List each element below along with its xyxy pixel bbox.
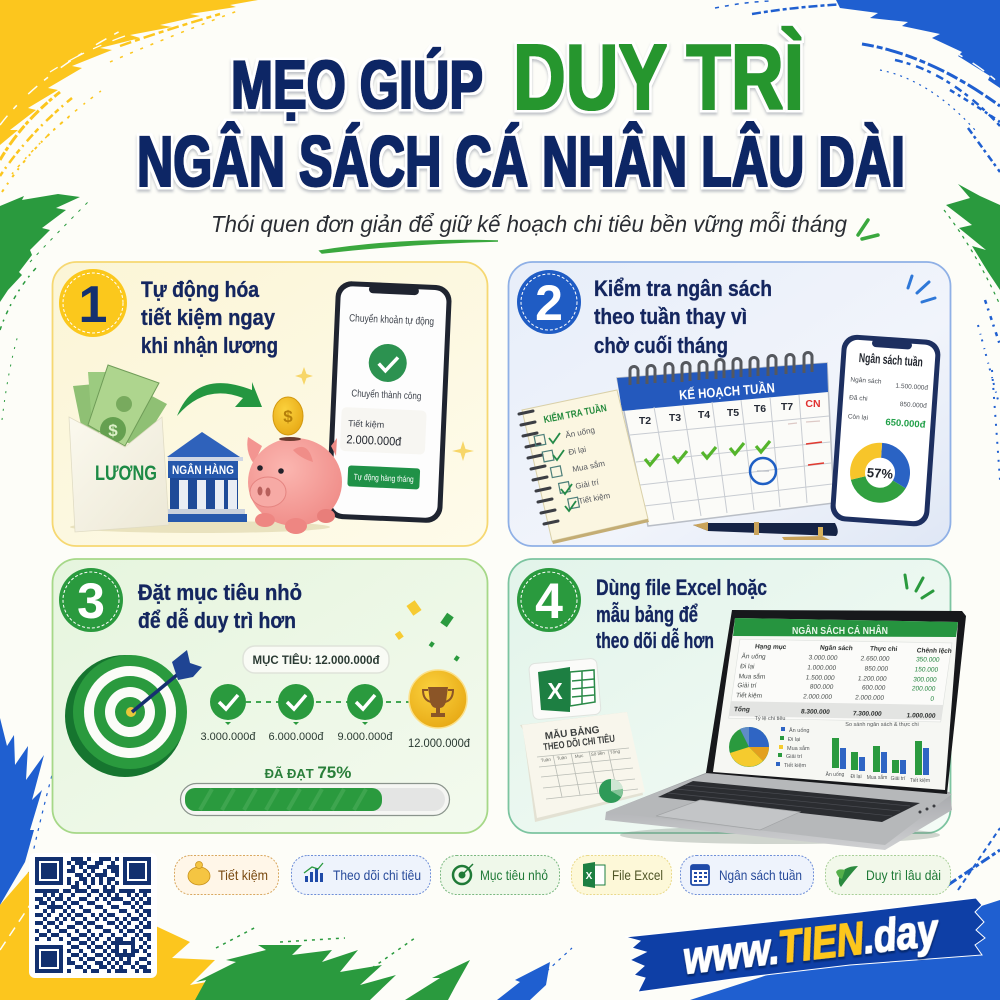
heading 2: Kiểm tra ngân sách	[594, 276, 772, 301]
budget table: 2.000.000	[855, 694, 885, 702]
arrow: salary to piggy bank	[177, 382, 262, 416]
laptop: personal budget: NGÂN SÁCH CÁ NHÂN	[792, 624, 888, 637]
notebook: weekly checklist: Mua sắm	[572, 459, 606, 474]
brush strokes: left blue	[0, 718, 52, 905]
brush strokes: bottom left yellow	[0, 868, 245, 1000]
notebook spirals	[519, 411, 558, 524]
progress label: ĐÃ ĐẠT 75%	[265, 763, 351, 782]
heading 4: mẫu bảng để	[596, 602, 698, 627]
phone: weekly budget: Đã chi	[849, 394, 868, 403]
budget table: Tổng	[733, 705, 750, 713]
pie chart: Đi lại	[788, 737, 800, 743]
pill: Mục tiêu nhỏ: Mục tiêu nhỏ	[480, 867, 548, 883]
phone: auto transfer: Chuyển thành công	[351, 387, 422, 402]
brush strokes: bottom blue	[497, 828, 1000, 1000]
heading 1	[141, 277, 278, 358]
badge 4: 4	[535, 573, 563, 629]
phone: weekly budget: 850.000đ	[899, 401, 927, 410]
brush strokes: right blue speckle	[978, 300, 1000, 480]
budget table	[729, 639, 953, 722]
pill: Tiết kiệm	[174, 856, 278, 894]
heading 1: khi nhận lương	[141, 333, 278, 358]
panel 3: small goals	[52, 559, 488, 833]
phone: auto transfer: 2.000.000đ	[346, 432, 402, 449]
heading 4: theo dõi dễ hơn	[596, 628, 714, 653]
laptop shadow	[620, 826, 940, 844]
budget table: Tiết kiệm	[735, 690, 763, 700]
notebook: weekly checklist: Tiết kiệm	[578, 491, 611, 506]
phone: auto transfer	[326, 281, 452, 523]
budget table: 1.000.000	[807, 664, 837, 672]
milestone 9.000.000đ: 9.000.000đ	[337, 731, 393, 743]
template sheet: Mục	[575, 753, 584, 759]
badge 3	[59, 568, 123, 632]
bar chart: Giải trí	[891, 776, 906, 782]
pie chart: Mua sắm	[787, 745, 810, 752]
budget table: 150.000	[914, 666, 939, 674]
pie chart: Giải trí	[786, 754, 803, 760]
laptop lid	[706, 610, 966, 794]
bar chart: Tiết kiệm	[910, 778, 930, 784]
icon: salary envelope with money: $	[108, 421, 118, 440]
template sheet: Số tiền	[591, 750, 606, 757]
budget table: 800.000	[809, 684, 834, 691]
budget table: 1.000.000	[906, 712, 936, 720]
calendar day labels: T5	[727, 407, 739, 419]
template sheet: THEO DÕI CHI TIÊU	[543, 732, 616, 753]
bar chart	[826, 722, 930, 784]
title line: MẸO GIÚP: MẸO GIÚP	[231, 47, 483, 123]
title	[137, 25, 905, 202]
pill: Ngân sách tuần: Ngân sách tuần	[719, 867, 802, 883]
phone: weekly budget: 650.000đ	[885, 417, 926, 431]
title line: DUY TRÌ: DUY TRÌ	[513, 25, 804, 129]
icon: bank: NGÂN HÀNG	[172, 464, 234, 477]
progress bar	[180, 784, 450, 816]
heading 3: Đặt mục tiêu nhỏ	[138, 580, 302, 605]
heading 2: theo tuần thay vì	[594, 304, 747, 329]
heading 3: để dễ duy trì hơn	[138, 608, 296, 633]
icon: excel: X	[547, 678, 563, 704]
badge 3: 3	[77, 573, 105, 629]
notebook: weekly checklist: Đi lại	[568, 445, 587, 457]
budget table: Mua sắm	[738, 671, 766, 681]
calendar red dashes	[806, 442, 824, 465]
milestone 3.000.000đ: 3.000.000đ	[200, 731, 256, 743]
icon: bank	[167, 432, 247, 522]
notebook: weekly checklist: Ăn uống	[565, 425, 596, 440]
phone: weekly budget: 1.500.000đ	[895, 383, 929, 392]
bar chart: Mua sắm	[867, 774, 887, 781]
tag pills	[174, 856, 950, 894]
panel 2: weekly budget check	[508, 262, 950, 546]
budget table: 0	[930, 696, 935, 703]
phone: auto transfer: Chuyển khoản tự động	[349, 312, 434, 328]
pill: Duy trì lâu dài: Duy trì lâu dài	[866, 867, 941, 883]
heading 1: Tự động hóa	[141, 277, 260, 302]
calendar: weekly plan: KẾ HOẠCH TUẦN	[679, 380, 775, 403]
pill: Tiết kiệm: Tiết kiệm	[218, 867, 268, 883]
notebook: weekly checklist	[519, 390, 649, 544]
bar chart: So sánh ngân sách & thực chi	[845, 722, 919, 728]
budget table: Đi lại	[740, 663, 756, 670]
calendar day labels: T4	[698, 409, 710, 421]
budget table: Thực chi	[869, 646, 898, 653]
budget table: 1.500.000	[805, 674, 835, 682]
website banner	[625, 898, 985, 992]
budget table: 200.000	[911, 685, 936, 693]
budget table: 300.000	[913, 676, 937, 684]
heading 1: tiết kiệm ngay	[141, 305, 276, 330]
template sheet: Tuần	[557, 755, 568, 761]
calendar day labels: T3	[669, 412, 681, 424]
panel 1: automate savings	[52, 262, 488, 546]
budget table: 2.650.000	[860, 655, 890, 663]
goal pill	[243, 646, 389, 673]
budget table: Ngân sách	[819, 645, 853, 652]
budget table: 1.200.000	[857, 675, 887, 683]
soft shadow	[70, 521, 330, 533]
budget table: 350.000	[916, 656, 940, 664]
phone: weekly budget: 57%	[866, 465, 894, 482]
badge 1	[59, 269, 127, 337]
milestone 3.000.000đ	[200, 684, 256, 743]
phone: auto transfer: Tự động hàng tháng	[354, 472, 414, 484]
bar chart: Đi lại	[850, 774, 862, 780]
pill: Theo dõi chi tiêu: Theo dõi chi tiêu	[333, 867, 421, 883]
template sheet: MẪU BẢNG	[544, 723, 600, 742]
icon: excel	[529, 658, 601, 720]
milestones	[200, 670, 470, 750]
calendar checks	[645, 441, 770, 465]
heading 3	[138, 580, 302, 633]
milestone 6.000.000đ: 6.000.000đ	[268, 731, 324, 743]
calendar day labels	[639, 398, 821, 427]
badge 1: 1	[79, 276, 107, 334]
brush strokes: top left green	[0, 194, 92, 420]
laptop deck	[605, 772, 952, 850]
pie chart: Ăn uống	[789, 727, 810, 734]
template sheet: Tổng	[609, 748, 621, 755]
website text: www.TIEN.day	[680, 903, 942, 984]
calendar highlighted day	[750, 458, 776, 484]
pill: Duy trì lâu dài	[826, 856, 950, 894]
calendar: weekly plan	[617, 352, 834, 526]
badge 2: 2	[535, 275, 563, 331]
calendar rings	[630, 352, 812, 385]
mini pie	[599, 779, 623, 803]
budget table: 2.000.000	[803, 693, 833, 701]
rays decoration	[908, 276, 935, 302]
budget table: Ăn uống	[741, 651, 767, 661]
pill: Theo dõi chi tiêu	[292, 856, 430, 894]
icon: target with arrow	[65, 650, 202, 777]
phone: auto transfer: Tiết kiệm	[348, 418, 384, 430]
budget table: 8.300.000	[800, 708, 831, 716]
phone: weekly budget: Ngân sách	[850, 376, 882, 386]
icon: piggy bank with coin	[247, 397, 342, 534]
budget table: Chênh lệch	[916, 647, 952, 655]
calendar day labels: T7	[781, 401, 793, 413]
donut chart	[856, 449, 904, 497]
pill: File Excel: X	[586, 871, 593, 882]
sparkles	[295, 367, 474, 461]
pill: Ngân sách tuần	[680, 856, 814, 894]
phone: weekly budget: Ngân sách tuần	[858, 350, 923, 369]
subtitle	[211, 210, 878, 253]
badge 2	[517, 270, 581, 334]
pill: File Excel	[572, 856, 672, 894]
laptop: personal budget	[605, 610, 966, 850]
brush strokes: top right blue	[715, 0, 1000, 172]
icon: salary envelope with money: LƯƠNG	[95, 462, 157, 485]
pie chart: Tiết kiệm	[784, 763, 807, 769]
checklist items	[534, 430, 579, 513]
QR code	[29, 853, 157, 978]
pen	[693, 522, 838, 540]
panel 4: excel templates	[508, 559, 966, 850]
pie chart	[729, 715, 810, 769]
heading 4: Dùng file Excel hoặc	[596, 575, 767, 600]
pill: File Excel: File Excel	[612, 867, 663, 883]
rays decoration	[905, 575, 933, 598]
icon: piggy bank with coin: $	[283, 407, 293, 426]
budget table: 7.300.000	[852, 710, 882, 718]
brush strokes: right green	[944, 184, 1000, 305]
heading 4	[596, 575, 767, 653]
brush strokes: bottom green	[195, 926, 470, 1000]
calendar day labels: CN	[805, 398, 821, 410]
badge 4	[517, 568, 581, 632]
pill: Mục tiêu nhỏ	[440, 856, 560, 894]
pie chart: Tỷ lệ chi tiêu	[755, 715, 785, 722]
subtitle: Thói quen đơn giản để giữ kế hoạch chi tiêu bền vững mỗi tháng	[211, 210, 847, 237]
budget table: 3.000.000	[808, 654, 838, 662]
calendar day labels: T6	[754, 403, 766, 415]
icon: salary envelope with money	[69, 365, 169, 532]
calendar day labels: T2	[639, 415, 651, 427]
phone: weekly budget	[830, 334, 941, 527]
milestone 6.000.000đ	[268, 684, 324, 743]
milestone trophy 12.000.000đ: 12.000.000đ	[408, 736, 470, 750]
heading 2	[594, 276, 772, 358]
brush strokes: top left yellow	[0, 0, 258, 192]
budget table: Hạng mục	[754, 643, 787, 651]
milestone 9.000.000đ	[337, 684, 393, 743]
bar chart: Ăn uống	[826, 771, 845, 778]
template sheet: Tuần	[541, 757, 552, 763]
notebook: weekly checklist: Giải trí	[575, 477, 600, 491]
notebook: weekly checklist: KIỂM TRA TUẦN	[542, 401, 608, 426]
heading 2: chờ cuối tháng	[594, 333, 728, 358]
milestone trophy 12.000.000đ	[408, 670, 470, 750]
budget table: 600.000	[861, 684, 886, 692]
template sheet	[520, 712, 645, 822]
phone: weekly budget: Còn lại	[848, 413, 868, 422]
goal pill: MỤC TIÊU: 12.000.000đ	[252, 652, 380, 667]
confetti	[395, 600, 460, 662]
budget table: 850.000	[864, 665, 889, 673]
budget table: Giải trí	[737, 682, 757, 690]
